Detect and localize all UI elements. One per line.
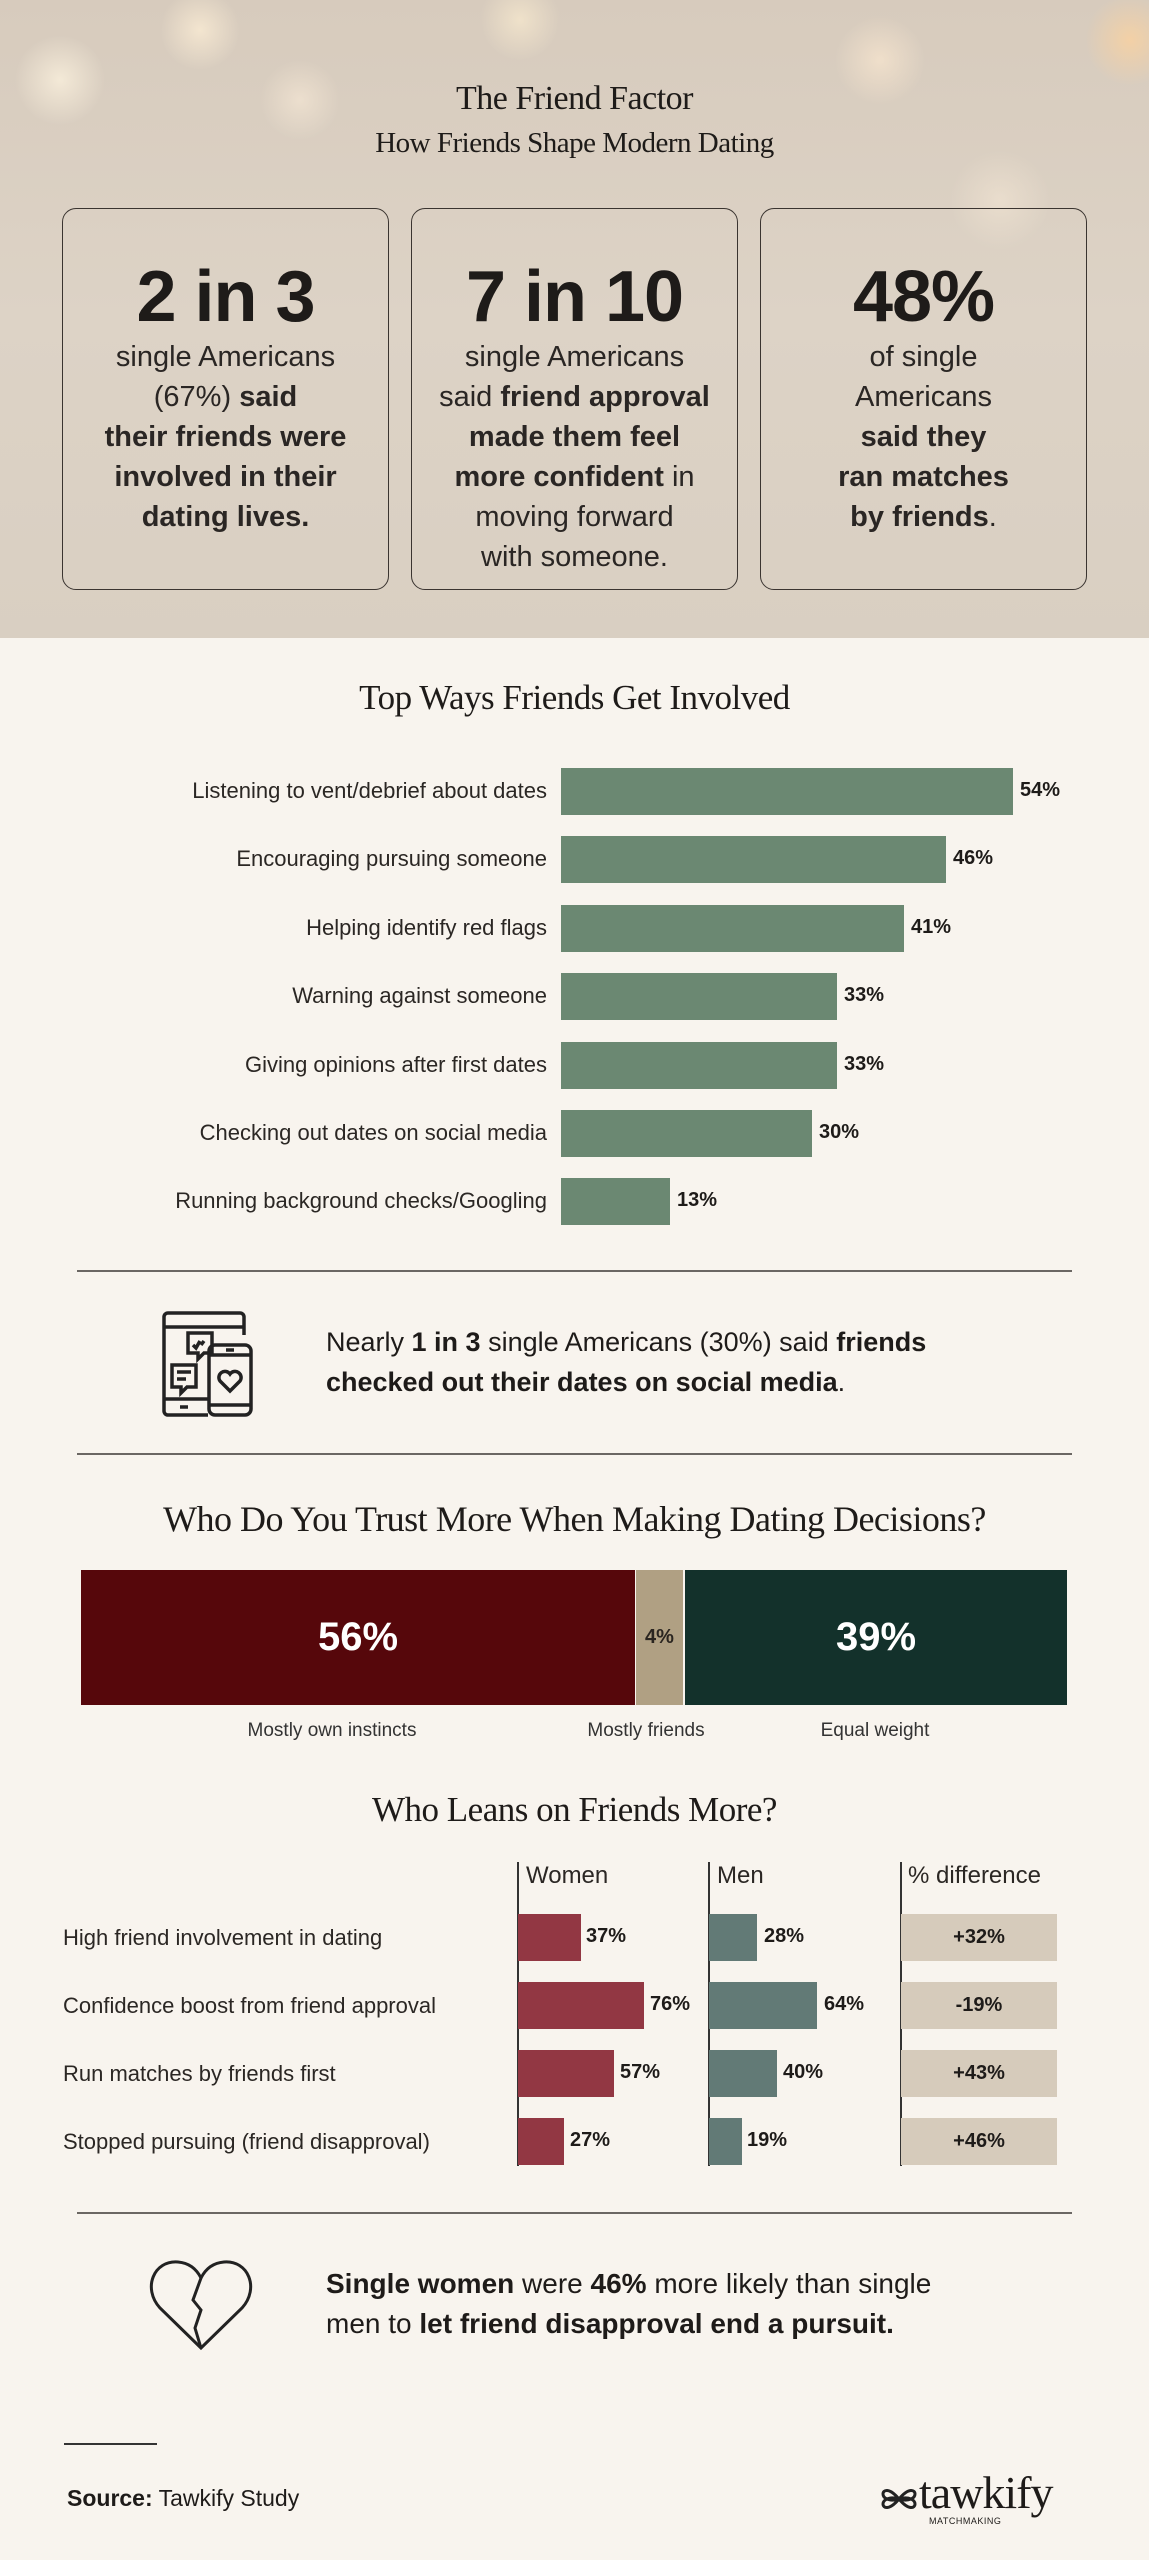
callout: social media xyxy=(326,1327,926,1397)
row 7: 13% xyxy=(677,1189,717,1211)
column headers xyxy=(526,1862,1041,1889)
heading: trust: Who Do You Trust More When Making Dating Decisions? xyxy=(163,1499,986,1539)
column headers: % difference xyxy=(908,1862,1041,1889)
card: 7 in 10: made them feel xyxy=(469,421,680,453)
card: 2 in 3: involved in their xyxy=(114,461,337,493)
row 2: Encouraging pursuing someone xyxy=(236,846,547,871)
row 4: 19% xyxy=(747,2129,787,2151)
row 3: Helping identify red flags xyxy=(306,915,547,940)
row 3: 40% xyxy=(783,2061,823,2083)
row 1 xyxy=(192,768,1060,815)
row 4: Stopped pursuing (friend disapproval) xyxy=(63,2129,430,2154)
legend labels: Mostly own instincts xyxy=(248,1720,416,1741)
row 1 xyxy=(63,1914,1057,1961)
logo: MATCHMAKING xyxy=(929,2516,1001,2526)
card: 2 in 3: dating lives. xyxy=(142,501,309,533)
row 4: 33% xyxy=(844,984,884,1006)
card: 2 in 3: (67%) said xyxy=(154,381,297,413)
row 1: +32% xyxy=(953,1926,1005,1948)
row 2: 76% xyxy=(650,1993,690,2015)
row 7 xyxy=(175,1178,717,1225)
row 3: 57% xyxy=(620,2061,660,2083)
card: 2 in 3: 2 in 3 xyxy=(136,257,315,337)
callout: women 46%: Single women were 46% more likely than single xyxy=(326,2268,931,2299)
row 6 xyxy=(200,1110,859,1157)
row 4: +46% xyxy=(953,2130,1005,2152)
card: 7 in 10: single Americans xyxy=(465,341,684,373)
logo: tawkify xyxy=(919,2467,1053,2518)
row 3: +43% xyxy=(953,2062,1005,2084)
segment: equal: 39% xyxy=(836,1615,916,1659)
row 4: 27% xyxy=(570,2129,610,2151)
card: 7 in 10: with someone. xyxy=(481,541,668,573)
icon: devices xyxy=(162,1311,253,1417)
row 2: 46% xyxy=(953,847,993,869)
heading: top ways: Top Ways Friends Get Involved xyxy=(359,678,790,717)
card: 48%: said they xyxy=(861,421,986,453)
column headers: Men xyxy=(717,1862,764,1889)
card: 7 in 10: 7 in 10 xyxy=(466,257,683,337)
row 3: Run matches by friends first xyxy=(63,2061,336,2086)
legend labels: Equal weight xyxy=(821,1720,929,1741)
source: Source: Tawkify Study xyxy=(67,2485,299,2511)
card: 2 in 3: single Americans xyxy=(116,341,335,373)
bar chart: top ways xyxy=(175,768,1060,1225)
card: 48%: Americans xyxy=(855,381,992,413)
row 5: Giving opinions after first dates xyxy=(245,1052,547,1077)
card: 7 in 10: more confident in xyxy=(454,461,695,493)
title: The Friend Factor xyxy=(456,80,693,117)
hero background xyxy=(0,0,1149,638)
row 6: 30% xyxy=(819,1121,859,1143)
row 5 xyxy=(245,1042,884,1089)
card: 48% xyxy=(760,208,1087,590)
segment: friends: 4% xyxy=(645,1626,674,1648)
row 6: Checking out dates on social media xyxy=(200,1120,547,1145)
row 3: 41% xyxy=(911,916,951,938)
segment: own instincts xyxy=(81,1570,635,1705)
card: 2 in 3 xyxy=(62,208,389,590)
segment: friends xyxy=(636,1570,683,1705)
row 2: Confidence boost from friend approval xyxy=(63,1993,436,2018)
row 1: 28% xyxy=(764,1925,804,1947)
segment: own instincts: 56% xyxy=(318,1615,398,1659)
card: 48%: by friends. xyxy=(850,501,997,533)
card: 48%: of single xyxy=(869,341,978,373)
card: 2 in 3: their friends were xyxy=(105,421,346,453)
row 1: Listening to vent/debrief about dates xyxy=(192,778,547,803)
row 1: High friend involvement in dating xyxy=(63,1925,382,1950)
icon: broken heart xyxy=(150,2260,252,2350)
card: 48%: ran matches xyxy=(838,461,1009,493)
row 1: 54% xyxy=(1020,779,1060,801)
row 7: Running background checks/Googling xyxy=(175,1188,547,1213)
heading: leans: Who Leans on Friends More? xyxy=(372,1790,777,1829)
row 3 xyxy=(63,2050,1057,2097)
row 1: 37% xyxy=(586,1925,626,1947)
row 2: -19% xyxy=(956,1994,1002,2016)
callout: women 46% xyxy=(326,2268,931,2339)
row 2 xyxy=(63,1982,1057,2029)
subtitle: How Friends Shape Modern Dating xyxy=(375,127,774,159)
table: leans xyxy=(63,1862,1057,2166)
row 4 xyxy=(63,2118,1057,2165)
row 4 xyxy=(292,973,884,1020)
callout: social media: Nearly 1 in 3 single Americans (30%) said friends xyxy=(326,1327,926,1357)
card: 7 in 10 xyxy=(411,208,738,590)
row 2 xyxy=(236,836,993,883)
card: 7 in 10: said friend approval xyxy=(439,381,710,413)
row 4: Warning against someone xyxy=(292,983,547,1008)
segment: equal xyxy=(685,1570,1067,1705)
legend labels: Mostly friends xyxy=(587,1720,705,1741)
logo xyxy=(882,2467,1054,2526)
column headers: Women xyxy=(526,1862,608,1889)
card: 7 in 10: moving forward xyxy=(475,501,674,533)
card: 48%: 48% xyxy=(853,257,994,337)
callout: social media: checked out their dates on social media. xyxy=(326,1367,845,1397)
callout: women 46%: men to let friend disapproval end a pursuit. xyxy=(326,2308,894,2339)
row 5: 33% xyxy=(844,1053,884,1075)
legend labels xyxy=(248,1720,930,1741)
stacked bar: trust xyxy=(81,1570,1067,1705)
row 2: 64% xyxy=(824,1993,864,2015)
row 3 xyxy=(306,905,951,952)
